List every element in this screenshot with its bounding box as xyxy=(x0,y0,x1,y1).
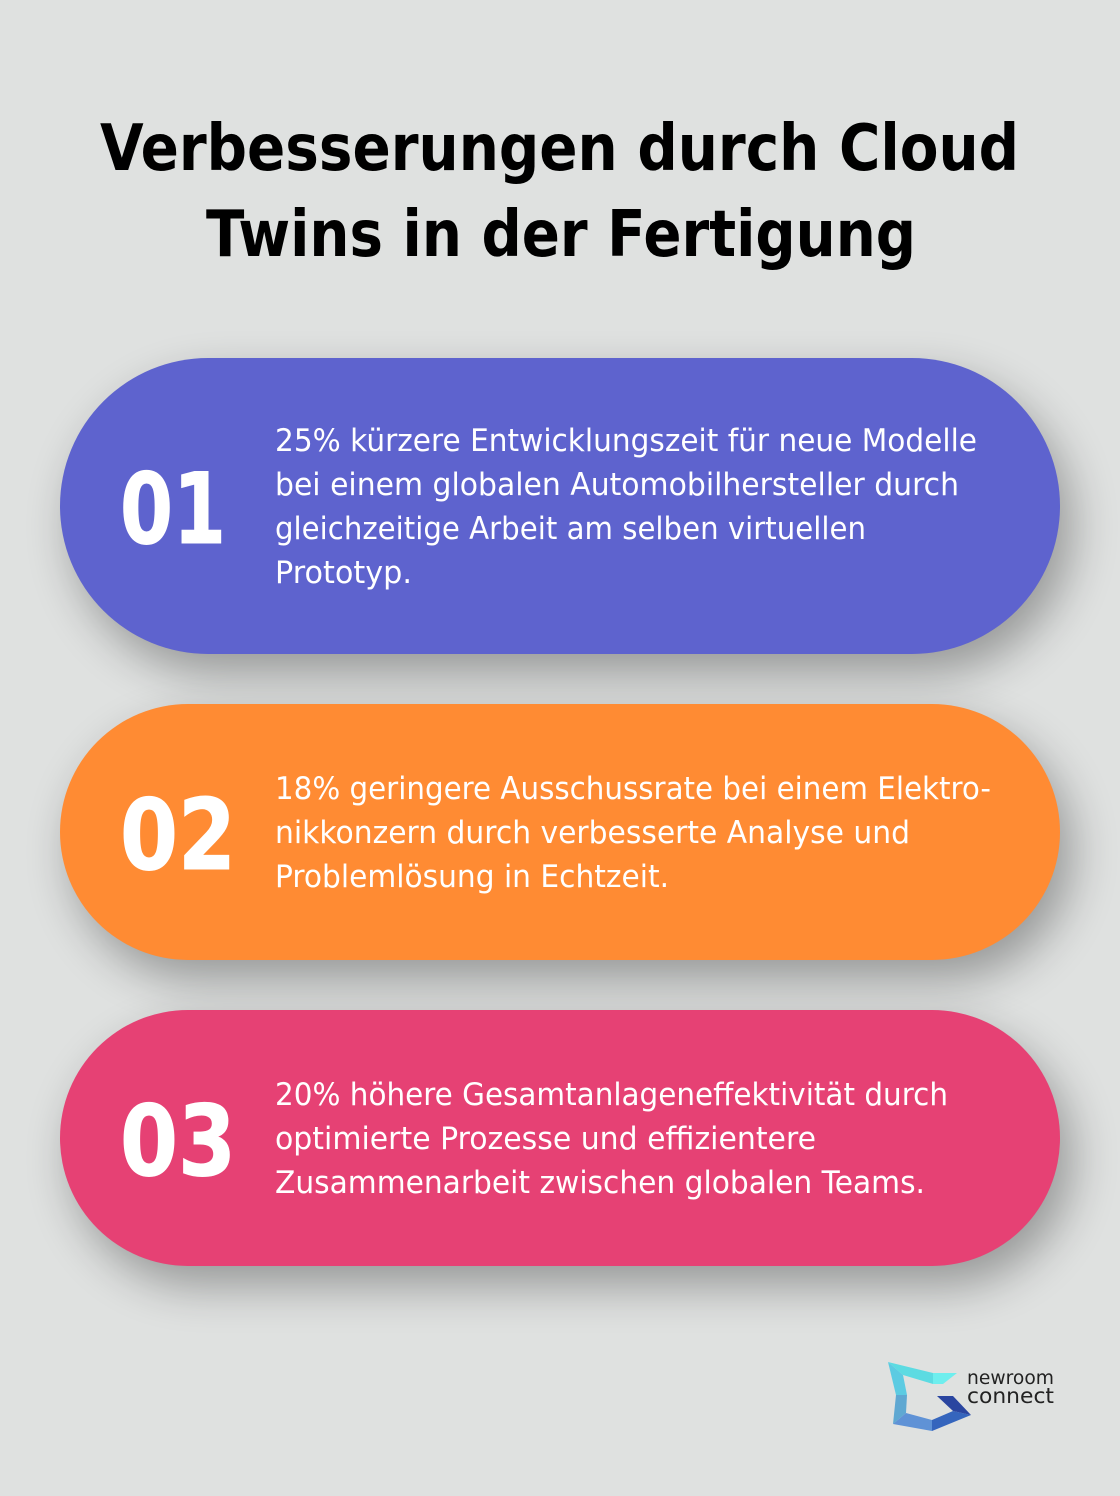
number 01: 01 xyxy=(120,453,226,567)
number 02: 02 xyxy=(120,779,236,893)
logo: newroom connect xyxy=(888,1362,1054,1431)
text block: card 02: nikkonzern durch verbesserte Analyse und xyxy=(275,815,910,851)
text block: card 01: gleichzeitige Arbeit am selben virtuellen xyxy=(275,511,866,547)
title xyxy=(100,112,1019,272)
number 03: 03 xyxy=(120,1085,236,1199)
panel: card 03 background xyxy=(60,1010,1060,1266)
text block: card 03: Zusammenarbeit zwischen globalen Teams. xyxy=(275,1165,925,1201)
text block: card 01 xyxy=(275,423,977,591)
title: Verbesserungen durch Cloud xyxy=(100,112,1019,186)
text block: card 01: Prototyp. xyxy=(275,555,412,591)
logo: newroom connect: connect xyxy=(967,1384,1054,1408)
text block: card 02: 18% geringere Ausschussrate bei einem Elektro- xyxy=(275,771,991,807)
text block: card 02: Problemlösung in Echtzeit. xyxy=(275,859,669,895)
text block: card 01: bei einem globalen Automobilhersteller durch xyxy=(275,467,959,503)
text block: card 01: 25% kürzere Entwicklungszeit für neue Modelle xyxy=(275,423,977,459)
panel: card 01 background xyxy=(60,358,1060,654)
text block: card 03: 20% höhere Gesamtanlageneffektivität durch xyxy=(275,1077,948,1113)
panel: card 02 background xyxy=(60,704,1060,960)
text block: card 03: optimierte Prozesse und effizientere xyxy=(275,1121,816,1157)
text block: card 02 xyxy=(275,771,991,895)
title: Twins in der Fertigung xyxy=(206,198,916,272)
text block: card 03 xyxy=(275,1077,948,1201)
logo: newroom connect: newroom xyxy=(967,1367,1054,1389)
